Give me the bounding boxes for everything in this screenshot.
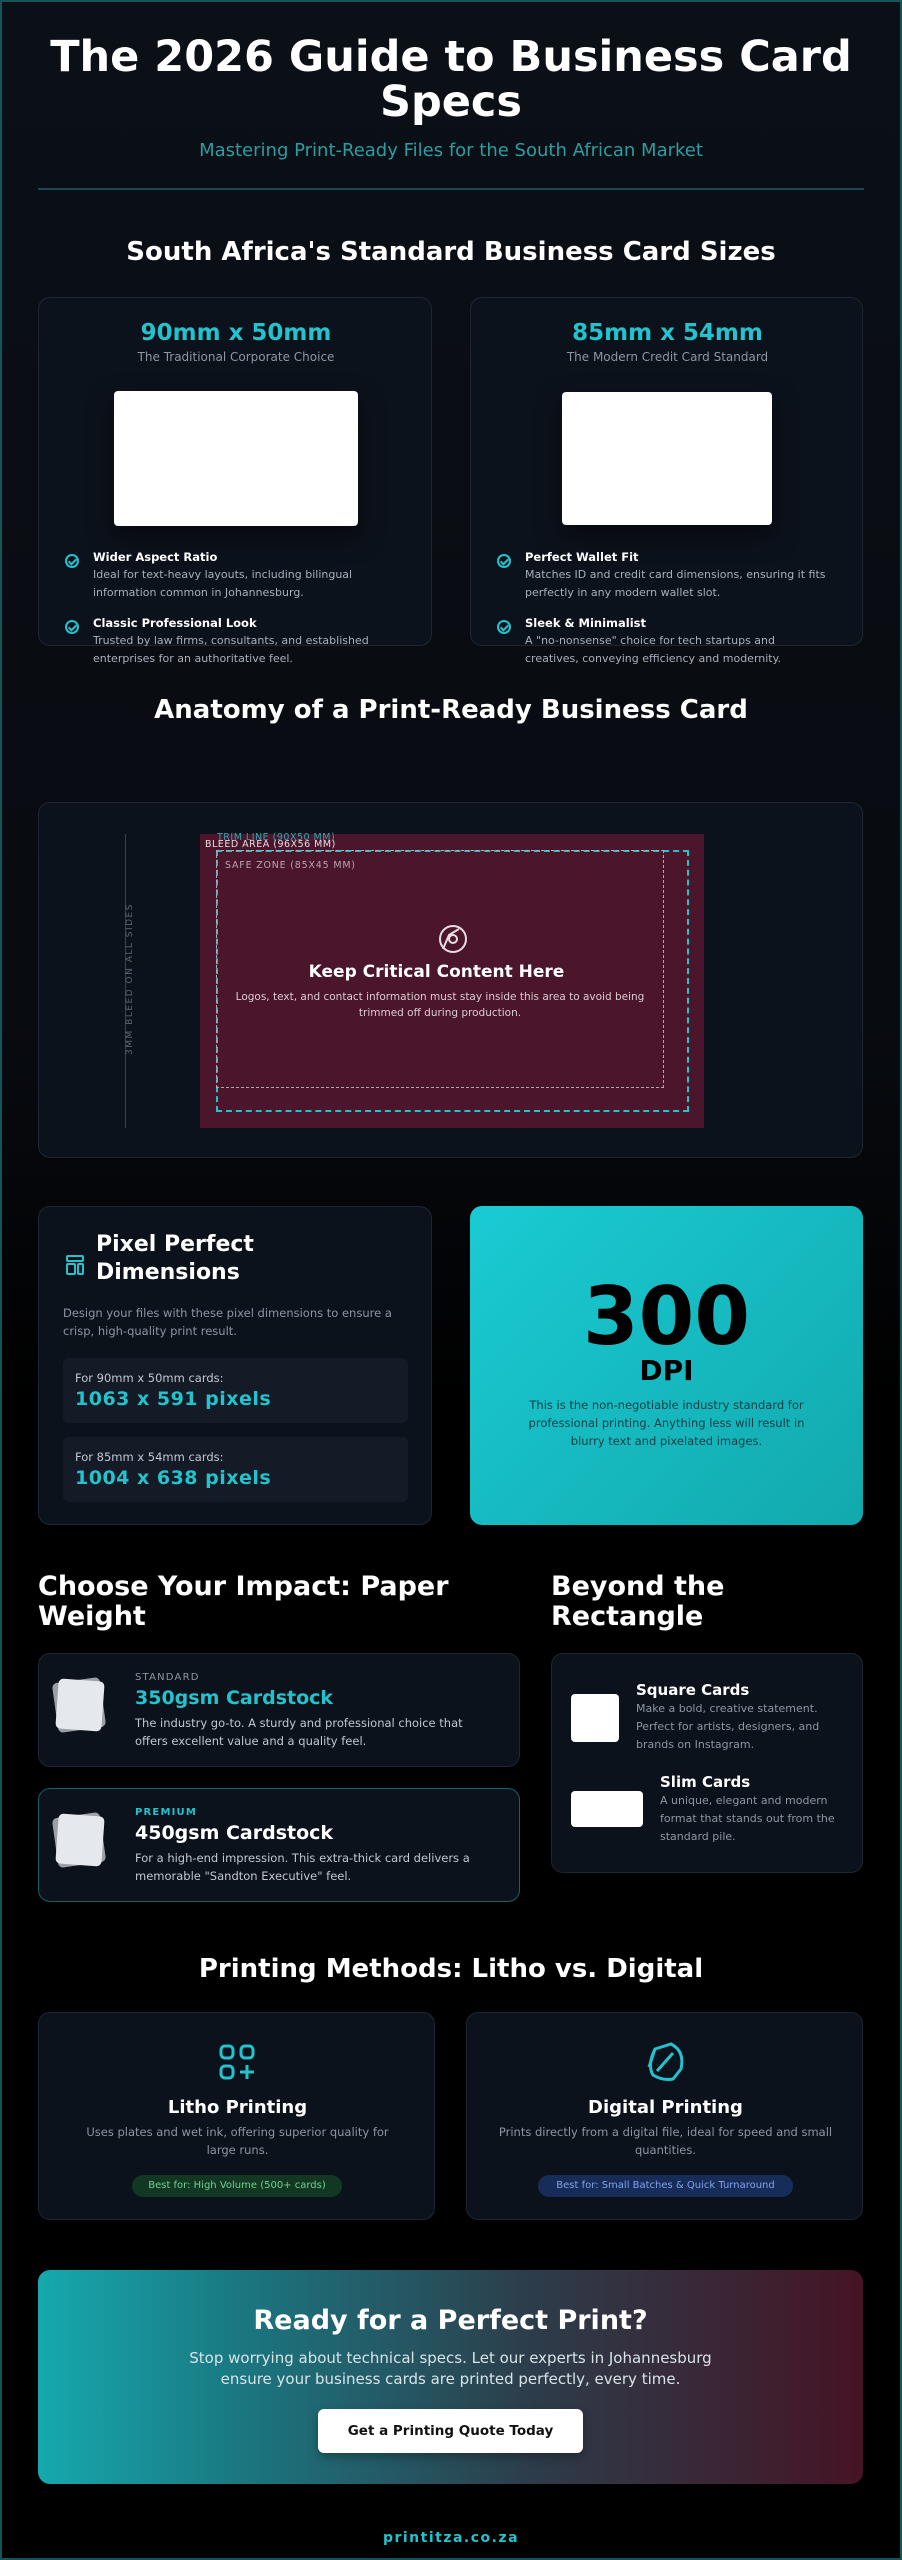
panel: litho: Litho Printing bbox=[168, 2097, 307, 2118]
footer: printitza.co.za bbox=[383, 2530, 519, 2546]
cta banner: Stop worrying about technical specs. Let our experts in Johannesburg ensure your business cards are printed perfectly, every time. bbox=[189, 2349, 712, 2388]
big number: 300 bbox=[583, 1270, 750, 1363]
card: 350gsm: STANDARD bbox=[135, 1672, 200, 1683]
size label: 90mm x 50mm bbox=[141, 320, 331, 346]
features: Sleek & Minimalist bbox=[525, 616, 646, 630]
icon: target bbox=[439, 925, 467, 953]
card: 350gsm: 350gsm Cardstock bbox=[135, 1687, 333, 1709]
trim label: TRIM LINE (90X50 MM) bbox=[217, 832, 335, 843]
panel: anatomy bbox=[38, 802, 863, 1158]
box: 90x50: For 90mm x 50mm cards: bbox=[75, 1371, 224, 1385]
panel: 85x54 bbox=[470, 297, 863, 646]
box: 90x50 bbox=[63, 1358, 408, 1423]
features bbox=[497, 550, 826, 665]
card: 350gsm bbox=[38, 1653, 520, 1767]
heading: beyond: Beyond the Rectangle bbox=[551, 1571, 724, 1632]
panel: 90x50 bbox=[38, 297, 432, 646]
panel: 300 dpi bbox=[470, 1206, 863, 1525]
heading: Pixel Perfect bbox=[96, 1232, 254, 1257]
features: Perfect Wallet Fit bbox=[525, 550, 639, 564]
description: This is the non-negotiable industry standard for professional printing. Anything less will result in blurry text and pixelated images. bbox=[529, 1398, 804, 1448]
heading: paper weight: Choose Your Impact: Paper Weight bbox=[38, 1571, 449, 1632]
box: 85x54: 1004 x 638 pixels bbox=[75, 1467, 271, 1489]
safe zone bbox=[216, 850, 664, 1088]
badge: Best for: High Volume (500+ cards) bbox=[148, 2180, 326, 2191]
features: Wider Aspect Ratio bbox=[93, 550, 217, 564]
bleed side label bbox=[125, 834, 126, 1128]
text: A "no-nonsense" choice for tech startups and creatives, conveying efficiency and modernity. bbox=[525, 634, 781, 665]
panel: litho bbox=[38, 2012, 435, 2220]
heading: Dimensions bbox=[96, 1260, 240, 1285]
icon: stack bbox=[52, 1678, 106, 1732]
safe zone: SAFE ZONE (85X45 MM) bbox=[225, 860, 356, 871]
cta banner bbox=[38, 2270, 863, 2484]
panel: digital: Digital Printing bbox=[588, 2097, 743, 2118]
safe zone heading: Keep Critical Content Here bbox=[309, 962, 564, 982]
panel: digital: Prints directly from a digital file, ideal for speed and small quantities. bbox=[499, 2125, 832, 2157]
text: Trusted by law firms, consultants, and established enterprises for an authoritative feel. bbox=[93, 634, 369, 665]
card mockup bbox=[562, 392, 772, 525]
card: 450gsm: 450gsm Cardstock bbox=[135, 1822, 333, 1844]
button bbox=[318, 2409, 583, 2453]
slim card bbox=[571, 1791, 643, 1827]
box: 90x50: 1063 x 591 pixels bbox=[75, 1388, 271, 1410]
cta banner: Ready for a Perfect Print? bbox=[253, 2305, 648, 2336]
card mockup bbox=[114, 391, 358, 526]
badge bbox=[538, 2175, 793, 2197]
trim line bbox=[216, 850, 689, 1112]
heading: sizes: South Africa's Standard Business Card Sizes bbox=[126, 237, 776, 267]
bleed area bbox=[200, 834, 704, 1128]
description: Design your files with these pixel dimensions to ensure a crisp, high-quality print result. bbox=[63, 1306, 392, 1338]
title: The 2026 Guide to Business Card Specs bbox=[50, 32, 852, 127]
panel: litho: Uses plates and wet ink, offering superior quality for large runs. bbox=[86, 2125, 389, 2157]
badge: Best for: Small Batches & Quick Turnaround bbox=[556, 2180, 775, 2191]
features: Matches ID and credit card dimensions, ensuring it fits perfectly in any modern wallet slot. bbox=[525, 568, 826, 599]
panel: beyond the rectangle bbox=[551, 1653, 863, 1873]
size subtitle: The Modern Credit Card Standard bbox=[567, 350, 768, 364]
panel: beyond the rectangle: A unique, elegant and modern format that stands out from the standard pile. bbox=[660, 1794, 835, 1843]
button: Get a Printing Quote Today bbox=[348, 2423, 553, 2439]
panel: digital bbox=[466, 2012, 863, 2220]
badge bbox=[132, 2175, 342, 2197]
card: 450gsm: PREMIUM bbox=[135, 1807, 197, 1818]
panel: beyond the rectangle: Square Cards bbox=[636, 1681, 749, 1699]
heading: anatomy: Anatomy of a Print-Ready Business Card bbox=[154, 695, 748, 725]
box: 85x54 bbox=[63, 1437, 408, 1502]
panel: beyond the rectangle: Make a bold, creative statement. Perfect for artists, designers, and brands on Instagram. bbox=[636, 1702, 819, 1751]
size subtitle: The Traditional Corporate Choice bbox=[138, 350, 334, 364]
heading: printing methods: Printing Methods: Litho vs. Digital bbox=[199, 1954, 703, 1984]
features: Classic Professional Look bbox=[93, 616, 257, 630]
icon: layout bbox=[66, 1255, 84, 1275]
unit: DPI bbox=[639, 1354, 694, 1387]
square card bbox=[571, 1694, 619, 1742]
card: 450gsm: For a high-end impression. This extra-thick card delivers a memorable "Sandton Executive" feel. bbox=[135, 1851, 470, 1883]
icon: grid bbox=[220, 2044, 254, 2080]
panel: anatomy: 3MM BLEED ON ALL SIDES bbox=[125, 903, 135, 1055]
size label: 85mm x 54mm bbox=[572, 320, 763, 346]
bleed label: BLEED AREA (96X56 MM) bbox=[205, 839, 336, 850]
icon: stack bbox=[52, 1812, 106, 1868]
panel: beyond the rectangle: Slim Cards bbox=[660, 1773, 750, 1791]
box: 85x54: For 85mm x 54mm cards: bbox=[75, 1450, 224, 1464]
icon: pen bbox=[648, 2042, 684, 2081]
heading bbox=[96, 1232, 254, 1285]
card: 450gsm bbox=[38, 1788, 520, 1902]
features bbox=[65, 550, 369, 665]
safe zone text: Logos, text, and contact information must stay inside this area to avoid being trimmed off during production. bbox=[236, 991, 644, 1019]
card: 350gsm: The industry go-to. A sturdy and professional choice that offers excellent value and a quality feel. bbox=[135, 1716, 463, 1748]
features: Ideal for text-heavy layouts, including bilingual information common in Johannesburg. bbox=[93, 568, 352, 599]
panel: pixel dimensions bbox=[38, 1206, 432, 1525]
subtitle: Mastering Print-Ready Files for the South African Market bbox=[199, 140, 703, 161]
